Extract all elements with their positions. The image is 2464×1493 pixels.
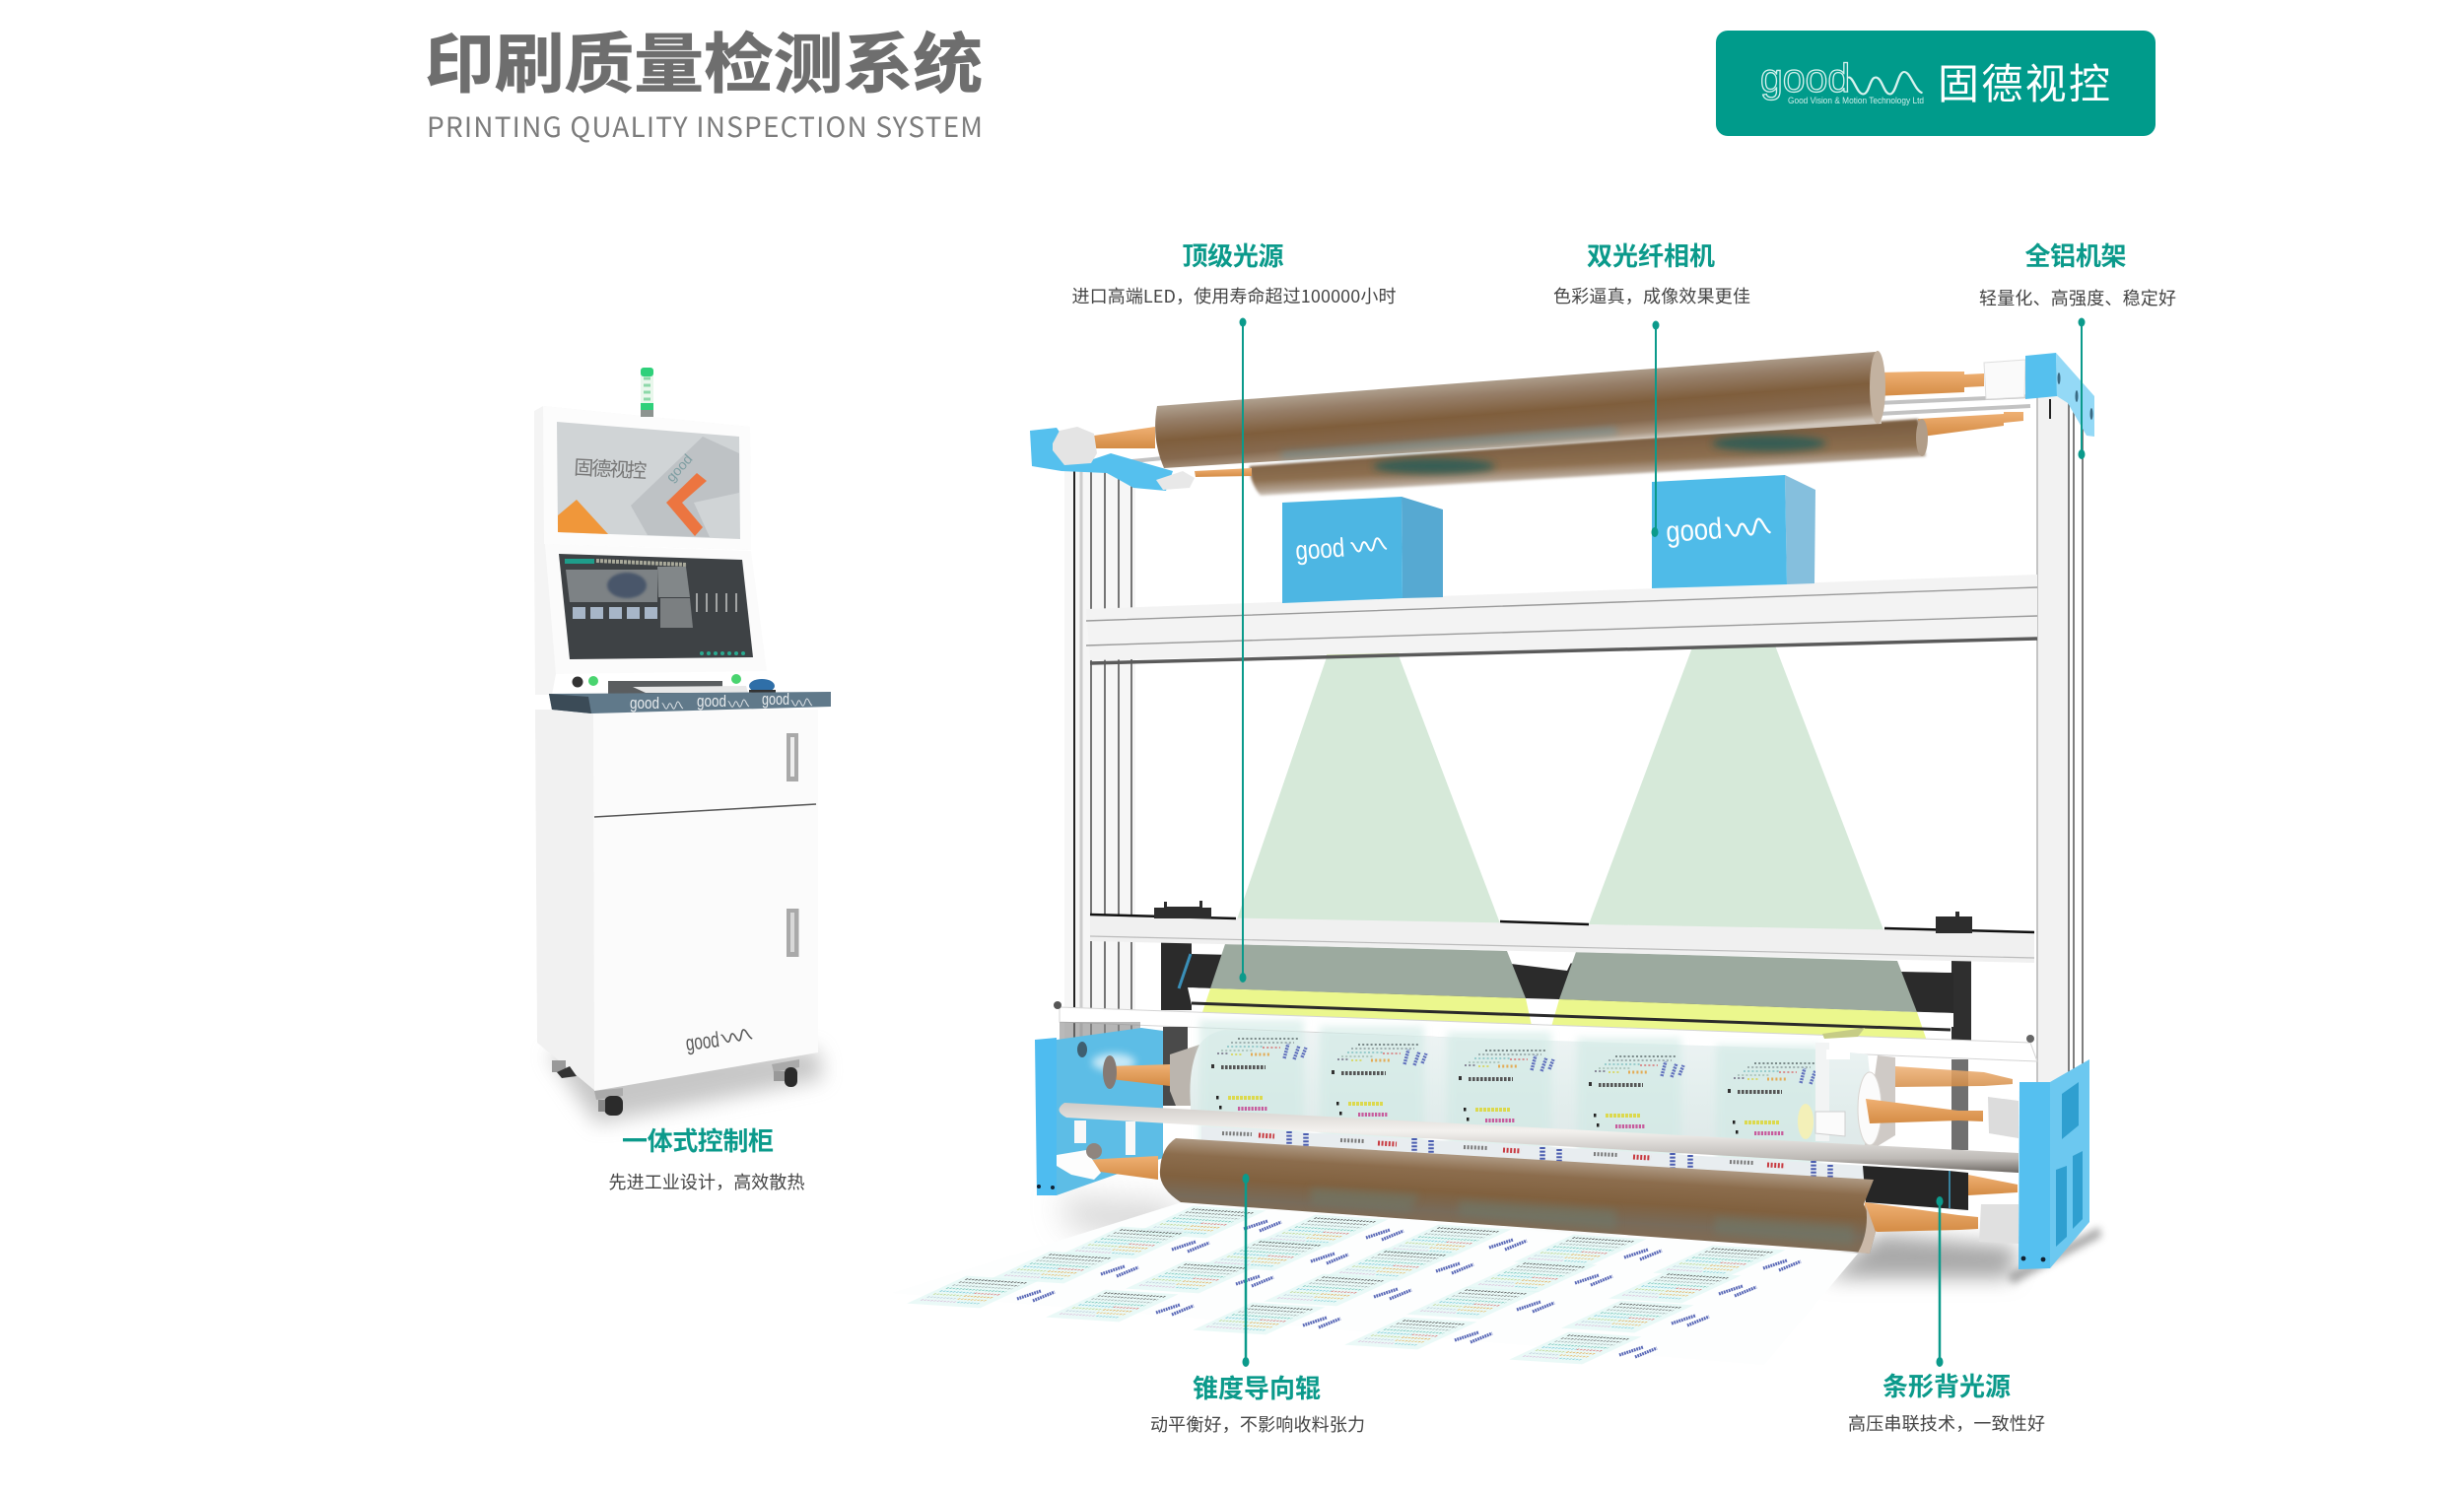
- lamp slivers: [1327, 642, 1774, 658]
- printed sheet on floor: [892, 1202, 1858, 1365]
- desk logos: good: [630, 694, 659, 713]
- logo badge: Good Vision & Motion Technology Ltd: [1788, 96, 1924, 105]
- rear top roller: [1250, 412, 2023, 496]
- cabinet shadow: [547, 1050, 823, 1123]
- left lower blue plate: [1035, 1027, 1188, 1195]
- lower monitor screen: [559, 554, 753, 659]
- silver rods: [1111, 396, 2030, 463]
- top left bracket: [1030, 427, 1252, 491]
- left frame posts: [1064, 463, 1135, 1045]
- desk logos: good: [762, 690, 789, 709]
- silver bar: [1059, 1103, 2019, 1173]
- callout: 全铝机架: 全铝机架: [2024, 237, 2127, 273]
- sensor mounts: [1154, 901, 1972, 933]
- callout: 全铝机架: 轻量化、高强度、稳定好: [1979, 285, 2176, 310]
- white gaps: [1188, 948, 1953, 1027]
- camera 1: [1282, 497, 1443, 603]
- cabinet front: [593, 710, 818, 1091]
- dark backlight box: [1863, 1166, 1968, 1210]
- desk logos: [630, 690, 812, 713]
- front top roller: [1094, 351, 1984, 468]
- cabinet logo: good: [684, 1027, 720, 1055]
- title: 印刷质量检测系统: [425, 12, 983, 106]
- lit area grey 1: [1210, 944, 1526, 998]
- paper between bar and lower roller: [1201, 1126, 1868, 1188]
- green light cone 2: [1589, 645, 1884, 932]
- top monitor screen: [557, 422, 740, 539]
- cabinet side panel: [535, 710, 595, 1091]
- green light cone 1: [1237, 655, 1500, 923]
- callout: 全铝机架: [1979, 237, 2176, 459]
- top monitor frame: [534, 406, 751, 550]
- casters: [552, 1059, 799, 1116]
- cabinet description: 先进工业设计，高效散热: [609, 1169, 804, 1194]
- top right bracket: [2025, 353, 2094, 437]
- cabinet logo: [684, 1023, 753, 1055]
- left post stubs above plate: [1060, 1022, 1140, 1043]
- right lower blue plate: [2019, 1059, 2089, 1269]
- logo badge: 固德视控: [1938, 51, 2110, 111]
- camera 2: good: [1665, 512, 1723, 549]
- logo badge: [1716, 31, 2156, 136]
- subtitle: PRINTING QUALITY INSPECTION SYSTEM: [427, 106, 983, 146]
- top monitor screen: 固德视控: [574, 451, 648, 484]
- camera 1: good: [1294, 533, 1345, 566]
- callout: 双光纤相机: 色彩逼真，成像效果更佳: [1553, 283, 1750, 308]
- yellow strip 2: [1551, 999, 1929, 1047]
- callout: 双光纤相机: 双光纤相机: [1587, 237, 1715, 273]
- print roll: [1103, 1020, 1983, 1169]
- backlight posts and dark bar: [1161, 941, 1971, 1042]
- callout: 双光纤相机: [1553, 237, 1750, 537]
- top monitor screen: good: [662, 451, 696, 485]
- control cabinet: [534, 368, 831, 1123]
- callout: 条形背光源: 高压串联技术，一致性好: [1848, 1410, 2045, 1436]
- white rail: [1054, 1001, 2037, 1061]
- logo badge: good: [1760, 55, 1850, 101]
- callout: 顶级光源: [1072, 237, 1396, 983]
- callout: 顶级光源: 顶级光源: [1183, 237, 1283, 273]
- callout: 条形背光源: [1848, 1196, 2045, 1436]
- lower beam: [1090, 915, 2034, 963]
- back shafts and right mechanism: [1895, 1059, 2019, 1150]
- callout: 条形背光源: 条形背光源: [1882, 1367, 2011, 1403]
- upper beam: [1086, 575, 2037, 663]
- callout: 锥度导向辊: 锥度导向辊: [1193, 1369, 1321, 1405]
- desk logos: good: [697, 692, 726, 711]
- camera 2: [1652, 475, 1815, 588]
- callout: 锥度导向辊: 动平衡好，不影响收料张力: [1150, 1411, 1365, 1437]
- floor shadows: [1060, 1197, 2101, 1284]
- lower monitor frame: [545, 544, 767, 674]
- callout: 锥度导向辊: [1150, 1174, 1365, 1437]
- cabinet label: 一体式控制柜: [622, 1121, 774, 1158]
- lower roller: [1057, 1138, 2019, 1254]
- inspection machine: [892, 351, 2101, 1365]
- desk top: [549, 692, 831, 713]
- signal light: [641, 368, 653, 417]
- desk controls: [572, 674, 776, 694]
- lit area grey 2: [1559, 952, 1917, 1012]
- right frame post: [2037, 394, 2083, 1084]
- yellow strip 1: [1201, 988, 1534, 1035]
- top right white clamp: [1984, 360, 2025, 399]
- door handles: [787, 733, 798, 957]
- callout: 顶级光源: 进口高端LED，使用寿命超过100000小时: [1072, 283, 1396, 308]
